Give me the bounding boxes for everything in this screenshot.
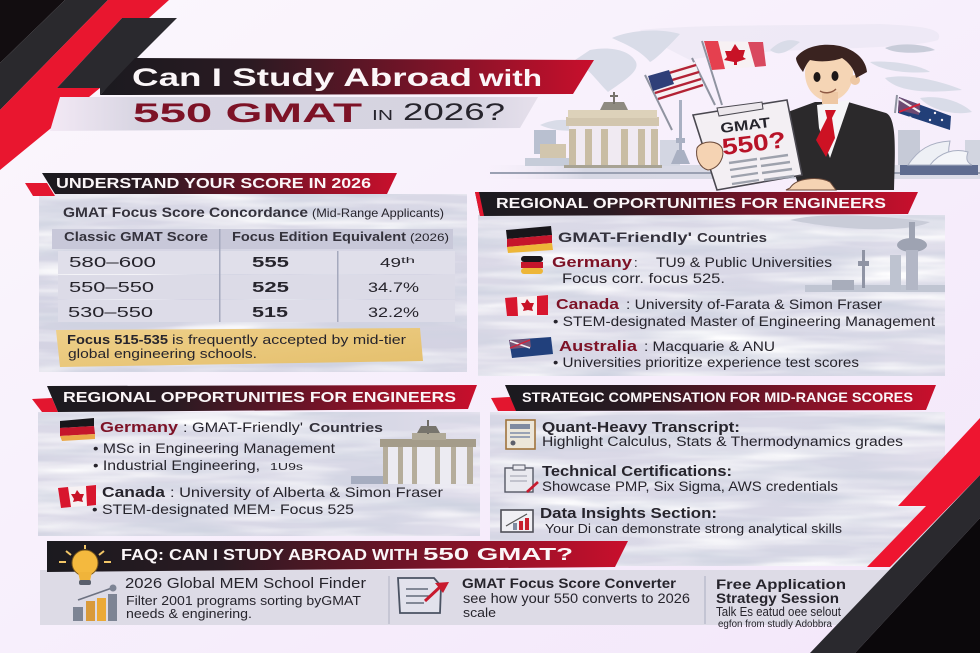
table title — [63, 205, 444, 220]
section heading: UNDERSTAND YOUR SCORE IN 2026 — [56, 175, 371, 192]
section: understand your score — [25, 173, 467, 372]
row: Australia — [509, 337, 859, 370]
panel background — [39, 194, 467, 372]
head — [796, 45, 867, 104]
row: quant-heavy transcript — [506, 420, 903, 449]
FAQ heading — [47, 541, 628, 572]
resource: strategy session: Strategy Session — [716, 591, 839, 606]
row: Australia: • Universities prioritize experience test scores — [553, 354, 859, 370]
bottom-right corner shapes — [810, 418, 980, 653]
score table: (2026) — [410, 232, 449, 244]
resource: school finder: 2026 Global MEM School Finder — [125, 575, 366, 592]
row: Australia: : Macquarie & ANU — [644, 338, 775, 354]
resource: score converter: see how your 550 converts to 2026 — [463, 591, 690, 606]
row: Canada: Canada — [102, 484, 166, 501]
row: technical certifications: Technical Certifications: — [542, 464, 732, 480]
section: regional opportunities, right — [475, 192, 945, 376]
callout: is frequently accepted by mid-tier — [172, 332, 407, 347]
row: Australia: Australia — [559, 338, 638, 355]
FAQ heading: FAQ: CAN I STUDY ABROAD WITH — [121, 547, 418, 564]
score table: 32.2% — [368, 304, 419, 320]
resource: strategy session: Talk Es eatud oee selout — [716, 605, 841, 619]
row: Germany: 1U9s — [270, 461, 303, 473]
row: quant-heavy transcript: Highlight Calculus, Stats & Thermodynamics grades — [542, 434, 903, 449]
clipboard: GMAT — [719, 114, 772, 136]
illustration: TV tower — [671, 100, 690, 164]
row: Canada: • STEM-designated Master of Engineering Management — [553, 313, 935, 329]
row: Canada: Canada — [556, 296, 620, 313]
section heading: REGIONAL OPPORTUNITIES FOR ENGINEERS — [496, 195, 886, 212]
title banner — [100, 58, 594, 95]
section heading — [491, 385, 936, 411]
title line 1 — [132, 64, 542, 92]
title line 1: Can I Study Abroad — [132, 64, 472, 92]
icon: Australia flag — [895, 95, 951, 130]
score table: Classic GMAT Score — [64, 230, 208, 244]
table title: GMAT Focus Score Concordance — [63, 205, 309, 220]
row: Canada: : University of Alberta & Simon Fraser — [170, 484, 443, 500]
score table: 555 — [252, 254, 289, 271]
panel background — [478, 215, 945, 376]
icon: light bulb — [59, 545, 111, 585]
illustration: towers — [790, 215, 945, 292]
row: Canada — [505, 295, 935, 329]
section: regional opportunities, left — [32, 385, 480, 536]
panel background — [490, 412, 945, 566]
section heading — [25, 173, 397, 196]
score table: 550–550 — [69, 279, 154, 296]
row: Germany: Focus corr. focus 525. — [562, 270, 725, 286]
row: Germany: Germany — [552, 254, 633, 271]
row: Germany: • MSc in Engineering Management — [93, 440, 335, 456]
section heading — [475, 192, 918, 216]
row: data insights: Data Insights Section: — [540, 506, 717, 522]
illustration: Sydney Opera House — [900, 141, 978, 175]
resource: strategy session — [716, 577, 846, 630]
score table — [52, 229, 455, 322]
row: GMAT-friendly countries: GMAT-Friendly' — [558, 229, 692, 245]
resource: strategy session: egfon from studly Adobbra — [718, 619, 832, 630]
row: Canada: • STEM-designated MEM- Focus 525 — [92, 501, 354, 517]
top-left corner shapes — [0, 0, 177, 170]
row: quant-heavy transcript: Quant-Heavy Transcript: — [542, 420, 740, 436]
illustration: Brandenburg Gate — [351, 420, 476, 484]
section heading: STRATEGIC COMPENSATION FOR MID-RANGE SCORES — [522, 390, 913, 405]
score table: 34.7% — [368, 279, 419, 295]
clipboard — [693, 100, 802, 190]
title subtitle band: 2026? — [403, 99, 505, 126]
resource: school finder — [73, 575, 366, 621]
score table: Focus Edition Equivalent — [232, 230, 407, 244]
score table: 525 — [252, 279, 289, 296]
row: Germany — [60, 418, 383, 473]
row: data insights — [501, 506, 842, 536]
row: Germany: : — [634, 255, 638, 270]
illustration: Brandenburg Gate — [564, 92, 662, 168]
resource: score converter — [398, 575, 690, 620]
FAQ heading: 550 GMAT? — [423, 544, 573, 564]
clipboard: 550? — [720, 126, 787, 160]
resource: school finder: needs & enginering. — [126, 606, 252, 621]
resource: score converter: GMAT Focus Score Converter — [462, 575, 677, 591]
panel background — [38, 412, 480, 536]
resource: strategy session: Free Application — [716, 577, 846, 592]
row: Germany: Germany — [100, 419, 179, 436]
row: technical certifications: Showcase PMP, Six Sigma, AWS credentials — [542, 479, 838, 494]
score table: 530–550 — [68, 304, 153, 321]
resource: school finder: Filter 2001 programs sorting byGMAT — [126, 593, 361, 608]
FAQ resource panel — [40, 570, 890, 630]
row: technical certifications — [505, 464, 838, 494]
callout: Focus 515-535 — [67, 333, 168, 347]
title subtitle band: IN — [372, 107, 393, 124]
resource: score converter: scale — [463, 605, 496, 620]
section: strategic compensation — [490, 385, 945, 566]
score table: 580–600 — [69, 254, 156, 271]
section heading: REGIONAL OPPORTUNITIES FOR ENGINEERS — [63, 389, 456, 406]
icon: USA flag — [645, 58, 715, 130]
callout — [56, 328, 423, 367]
title line 1: with — [478, 65, 542, 91]
row: Canada — [58, 484, 443, 517]
icon: Canada flag — [702, 41, 766, 105]
section heading — [32, 385, 477, 412]
title subtitle band — [50, 97, 538, 131]
title subtitle band: 550 GMAT — [133, 98, 363, 128]
illustration: world map and skyline backdrop — [485, 24, 980, 179]
row: Germany: Countries — [309, 420, 383, 435]
table title: (Mid-Range Applicants) — [312, 206, 444, 220]
row: Germany: • Industrial Engineering, — [93, 457, 260, 473]
row: Germany — [521, 254, 832, 286]
hands — [697, 142, 836, 190]
illustration: student in suit — [693, 45, 895, 190]
row: GMAT-friendly countries — [506, 226, 767, 253]
shirt and tie — [816, 100, 850, 158]
score table: th — [401, 255, 416, 265]
row: Germany: TU9 & Public Universities — [656, 254, 832, 270]
row: data insights: Your Di can demonstrate strong analytical skills — [545, 522, 842, 536]
score table: 515 — [252, 304, 288, 321]
suit — [785, 102, 895, 190]
row: Canada: : University of-Farata & Simon Fraser — [626, 296, 882, 312]
row: Germany: : GMAT-Friendly' — [183, 419, 303, 435]
callout: global engineering schools. — [68, 346, 257, 361]
score table: 49 — [380, 255, 401, 270]
row: GMAT-friendly countries: Countries — [697, 231, 767, 245]
